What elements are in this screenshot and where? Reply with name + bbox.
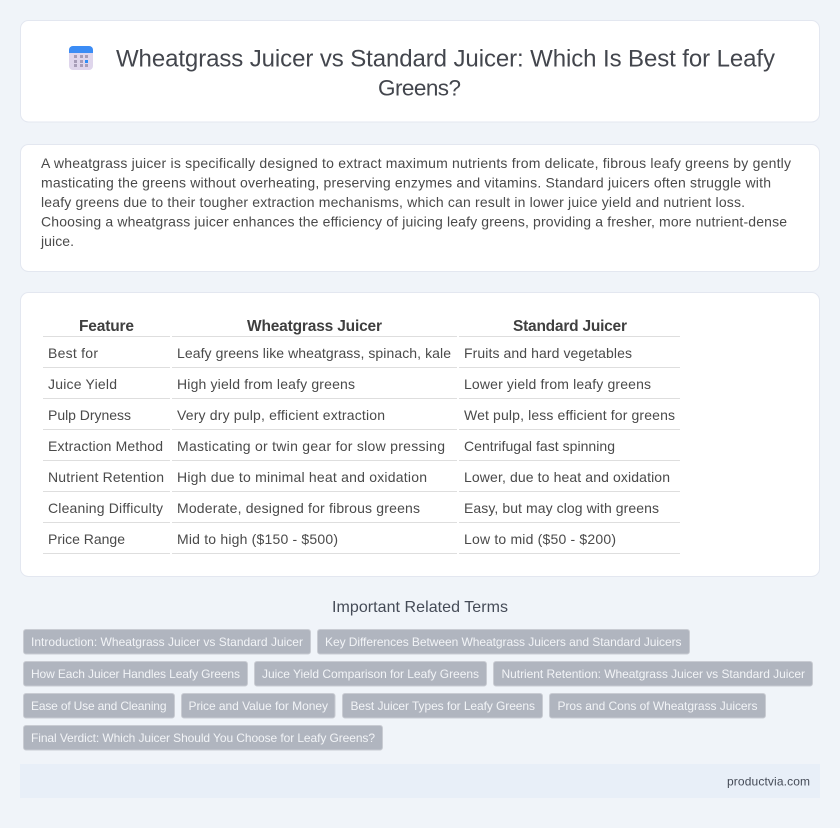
related term tags: Nutrient Retention: Wheatgrass Juicer vs Standard Juicer [502, 667, 805, 681]
related term tags [24, 630, 812, 750]
table header [79, 318, 627, 335]
table header: Wheatgrass Juicer [247, 318, 382, 335]
row: cleaning difficulty: Easy, but may clog with greens [464, 500, 659, 516]
row: extraction method: Extraction Method [48, 438, 163, 454]
row: cleaning difficulty: Cleaning Difficulty [48, 500, 163, 516]
related term tags: Price and Value for Money [188, 699, 328, 713]
title [116, 46, 775, 100]
related term tags: Pros and Cons of Wheatgrass Juicers [558, 699, 758, 713]
row: best for [48, 345, 632, 361]
description text: Choosing a wheatgrass juicer enhances the efficiency of juicing leafy greens, providing a fresher, more nutrient-dense [41, 214, 787, 230]
related term tags: Key Differences Between Wheatgrass Juicers and Standard Juicers [325, 635, 682, 649]
footer source: productvia.com [727, 774, 810, 788]
row: pulp dryness [48, 407, 675, 423]
row: nutrient retention: Lower, due to heat and oxidation [464, 469, 670, 485]
row: price range: Mid to high ($150 - $500) [177, 531, 338, 547]
heading: important related terms: Important Related Terms [332, 599, 508, 616]
related term tags: Introduction: Wheatgrass Juicer vs Standard Juicer [31, 635, 303, 649]
footer [20, 764, 820, 798]
title: Greens? [378, 76, 461, 100]
row: price range: Price Range [48, 531, 125, 547]
row: best for: Leafy greens like wheatgrass, spinach, kale [177, 345, 451, 361]
row: juice yield: Juice Yield [48, 376, 117, 392]
icon: calendar [69, 46, 93, 70]
related term tags: How Each Juicer Handles Leafy Greens [31, 667, 240, 681]
row: juice yield: Lower yield from leafy greens [464, 376, 651, 392]
panel: comparison table [20, 292, 820, 576]
title: Wheatgrass Juicer vs Standard Juicer: Which Is Best for Leafy [116, 46, 775, 72]
panel: description [20, 144, 820, 272]
row: extraction method: Masticating or twin gear for slow pressing [177, 438, 445, 454]
row: price range: Low to mid ($50 - $200) [464, 531, 616, 547]
row: cleaning difficulty: Moderate, designed for fibrous greens [177, 500, 420, 516]
row: nutrient retention: High due to minimal heat and oxidation [177, 469, 427, 485]
row: nutrient retention: Nutrient Retention [48, 469, 164, 485]
header panel [20, 20, 820, 122]
related term tags: Best Juicer Types for Leafy Greens [350, 699, 535, 713]
related term tags: Final Verdict: Which Juicer Should You Choose for Leafy Greens? [31, 731, 375, 745]
row: extraction method: Centrifugal fast spinning [464, 438, 615, 454]
row: best for: Best for [48, 345, 98, 361]
related term tags: Juice Yield Comparison for Leafy Greens [262, 667, 479, 681]
row: nutrient retention [48, 469, 670, 485]
description text: A wheatgrass juicer is specifically designed to extract maximum nutrients from delicate, fibrous leafy greens by gently [41, 155, 791, 171]
row: juice yield: High yield from leafy greens [177, 376, 355, 392]
description text: juice. [40, 233, 74, 249]
row: pulp dryness: Very dry pulp, efficient extraction [177, 407, 385, 423]
row: juice yield [48, 376, 651, 392]
description text [40, 155, 791, 249]
table header: Standard Juicer [513, 318, 627, 335]
description text: masticating the greens without overheating, preserving enzymes and vitamins. Standard juicers often struggle with [41, 174, 771, 190]
row: best for: Fruits and hard vegetables [464, 345, 632, 361]
table header: Feature [79, 318, 134, 335]
row: pulp dryness: Wet pulp, less efficient for greens [464, 407, 675, 423]
row: price range [48, 531, 616, 547]
related term tags: Ease of Use and Cleaning [31, 699, 166, 713]
row: cleaning difficulty [48, 500, 659, 516]
row: extraction method [48, 438, 615, 454]
row: pulp dryness: Pulp Dryness [48, 407, 131, 423]
description text: leafy greens due to their tougher extraction mechanisms, which can result in lower juice yield and nutrient loss. [41, 194, 745, 210]
